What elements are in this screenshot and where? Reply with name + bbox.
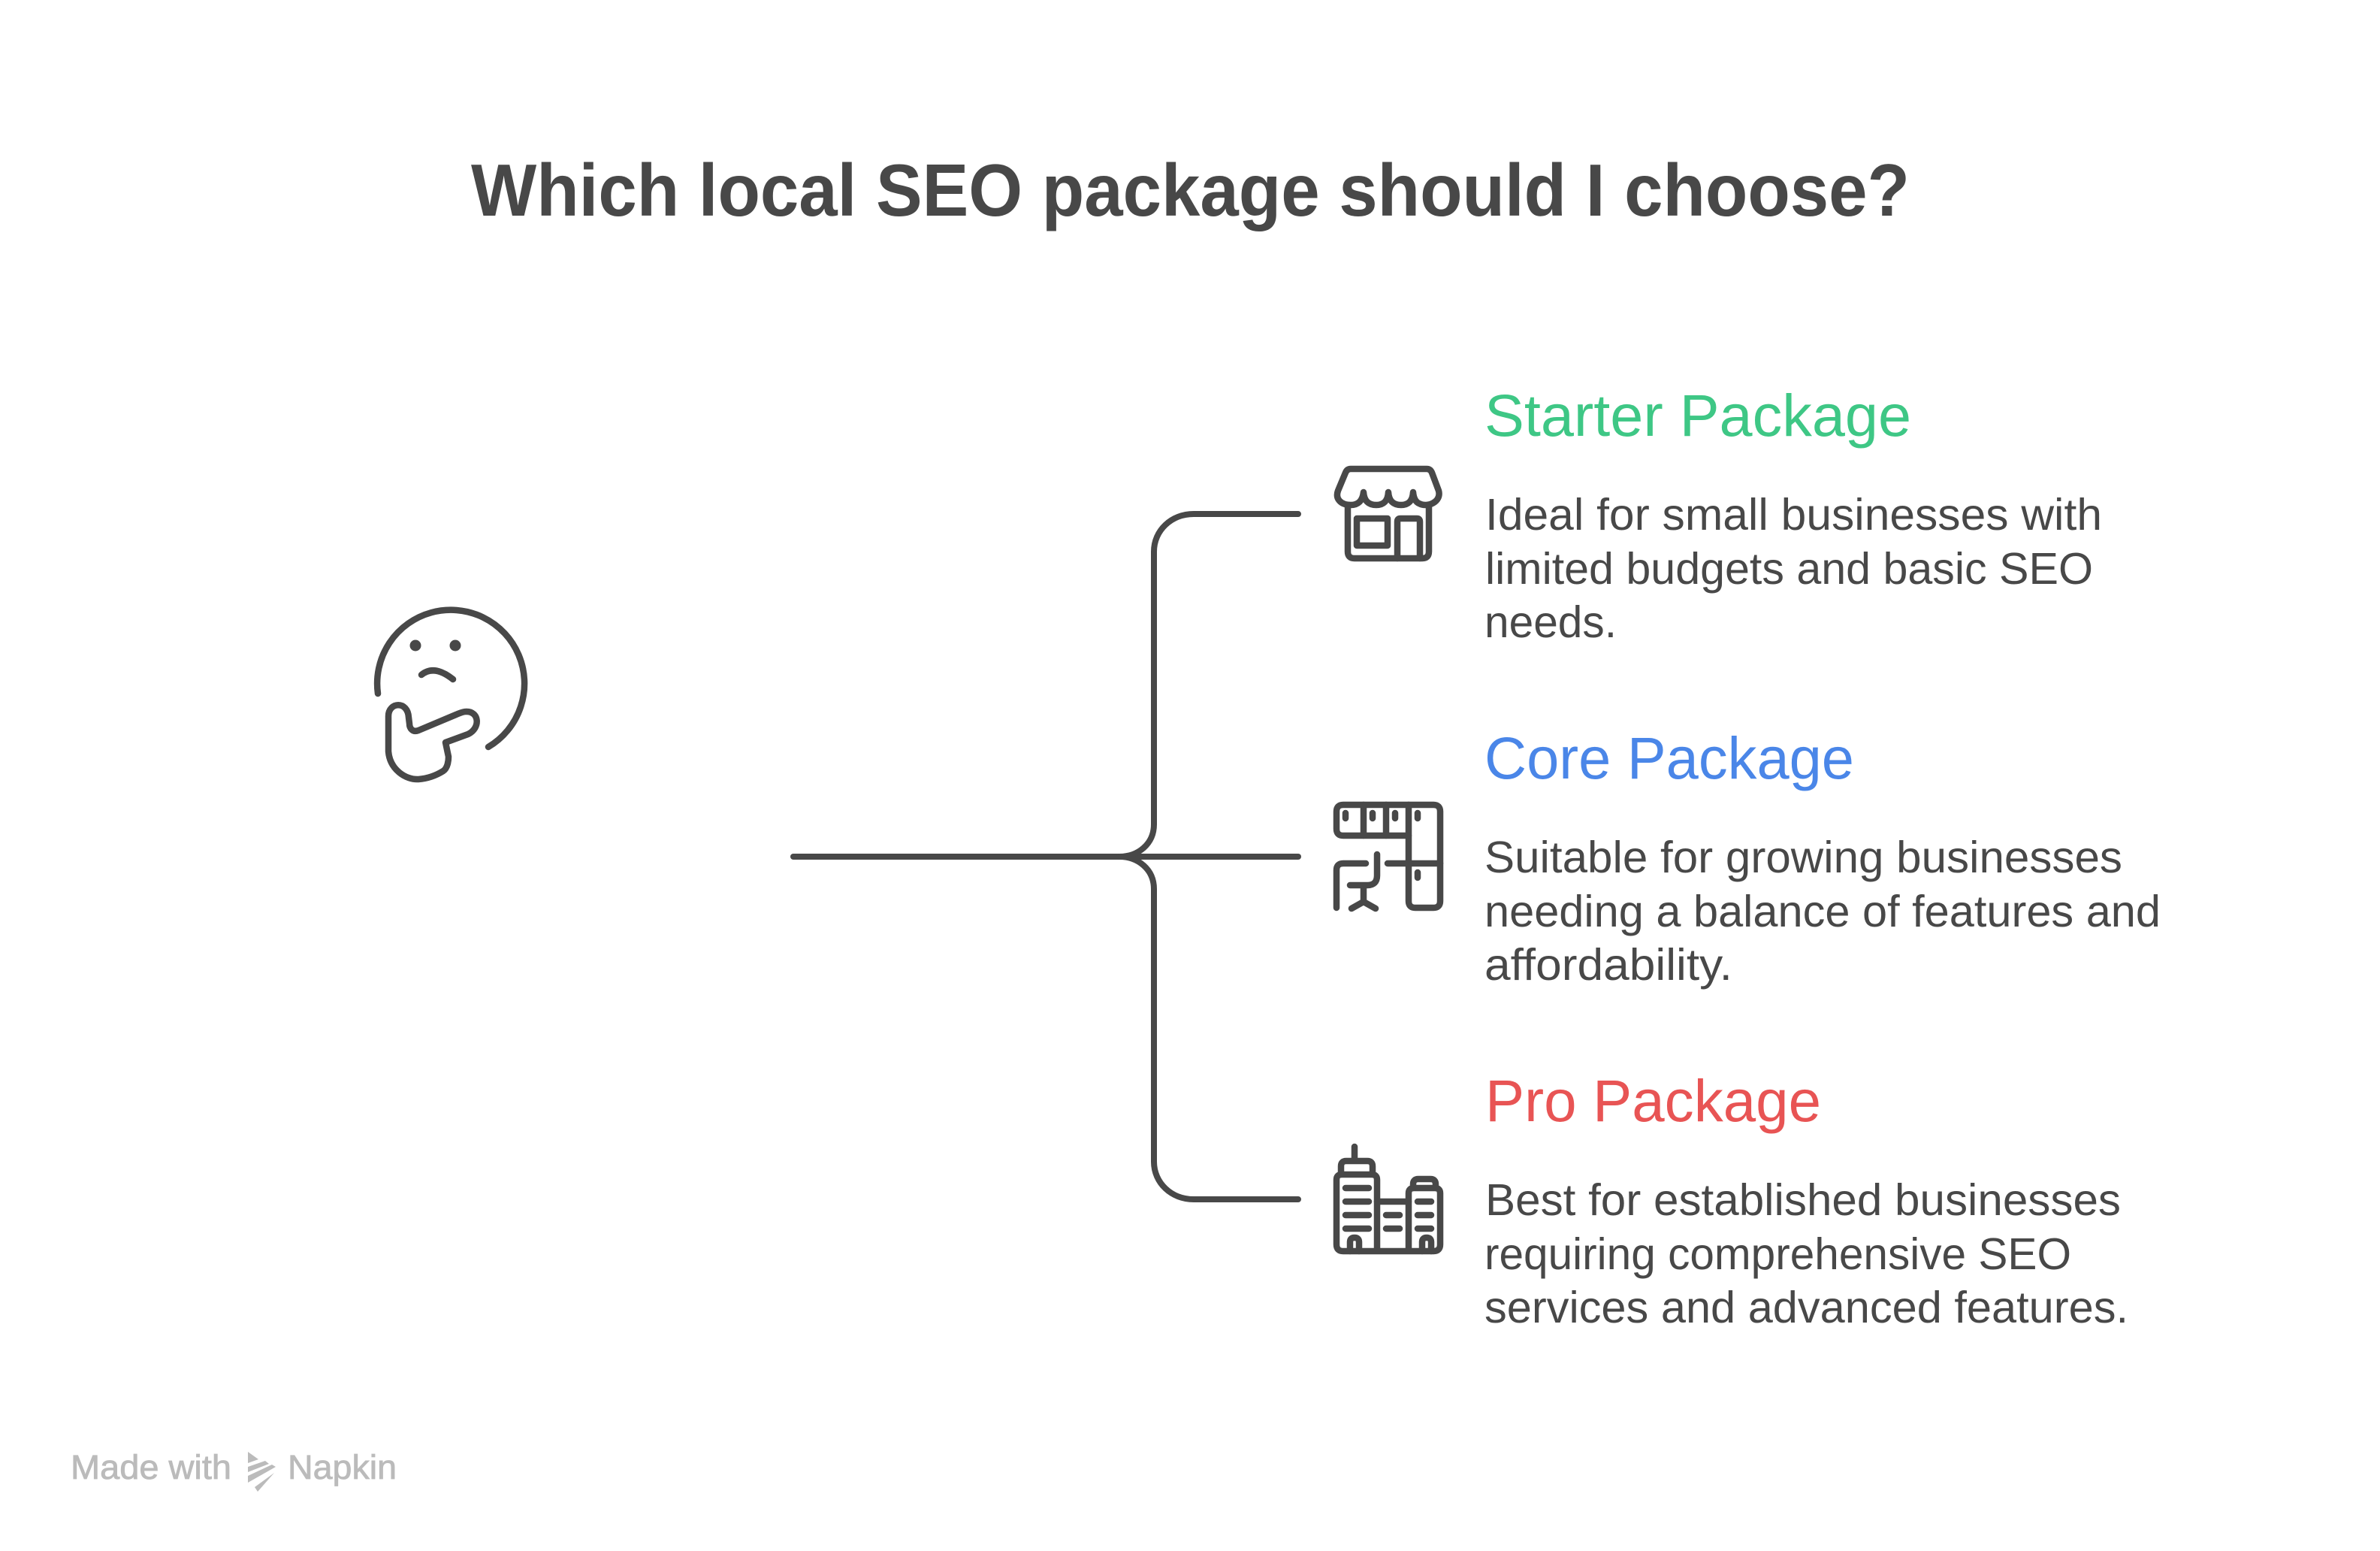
- footer: made with napkin: Napkin: [288, 1448, 397, 1486]
- footer: made with napkin: [71, 1448, 397, 1492]
- text: starter description: [1484, 490, 2102, 647]
- text: core description: needing a balance of features and: [1484, 887, 2161, 936]
- icon: storefront: [1337, 469, 1439, 558]
- text: core description: Suitable for growing businesses: [1484, 833, 2122, 882]
- text: starter description: limited budgets and basic SEO: [1485, 544, 2093, 594]
- text: core description: affordability.: [1484, 940, 1732, 990]
- icon: office buildings: [1336, 1147, 1440, 1251]
- branching connector: [793, 514, 1298, 1199]
- text: starter description: Ideal for small businesses with: [1485, 490, 2102, 540]
- text: pro description: [1484, 1175, 2128, 1332]
- icon: thinking face: [377, 610, 524, 779]
- text: pro description: requiring comprehensive SEO: [1484, 1229, 2071, 1279]
- heading: starter package: Starter Package: [1484, 382, 1911, 449]
- text: pro description: Best for established businesses: [1485, 1175, 2121, 1225]
- text: starter description: needs.: [1484, 597, 1617, 647]
- footer: made with napkin: Made with: [71, 1448, 231, 1486]
- text: pro description: services and advanced features.: [1484, 1283, 2128, 1332]
- title: Which local SEO package should I choose?: [471, 149, 1910, 231]
- text: core description: [1484, 833, 2161, 990]
- icon: office furniture: [1336, 805, 1440, 909]
- heading: core package: Core Package: [1484, 724, 1854, 791]
- heading: pro package: Pro Package: [1485, 1067, 1821, 1134]
